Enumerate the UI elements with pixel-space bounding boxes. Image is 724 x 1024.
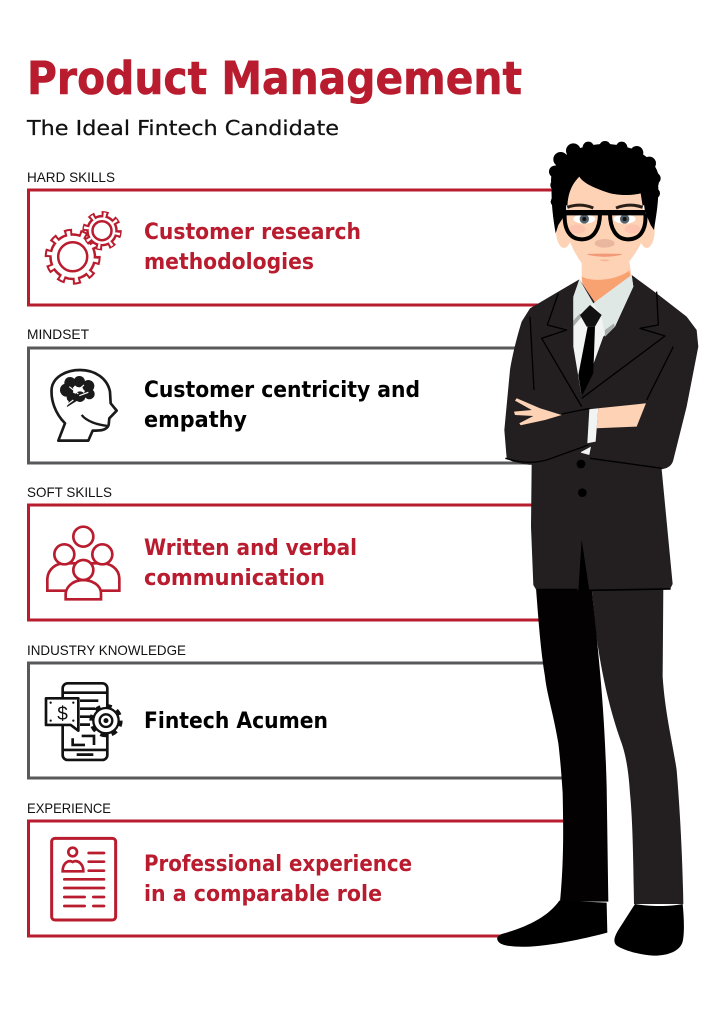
- panel text: hard skills: methodologies: [144, 250, 314, 275]
- panel: mindset: [27, 326, 545, 463]
- section label: mindset: MINDSET: [27, 326, 89, 342]
- panel text: experience: in a comparable role: [144, 882, 382, 907]
- panel frame: soft skills: [28, 505, 550, 620]
- man: jacket vent and buttons: [577, 460, 589, 591]
- title: Product Management: [27, 52, 522, 105]
- panel frame: mindset: [28, 348, 545, 463]
- panel frame: hard skills: [28, 190, 560, 305]
- man: legs and shoes: [497, 588, 684, 956]
- section label: industry knowledge: INDUSTRY KNOWLEDGE: [27, 642, 186, 658]
- panel text: soft skills: Written and verbal: [144, 536, 357, 561]
- panel text: mindset: empathy: [144, 408, 247, 433]
- panel text: hard skills: Customer research: [144, 220, 361, 245]
- panel frame: experience: [28, 821, 575, 936]
- panel text: mindset: Customer centricity and: [144, 378, 420, 403]
- section label: soft skills: SOFT SKILLS: [27, 484, 112, 500]
- panel text: experience: Professional experience: [144, 852, 412, 877]
- panel: hard skills: [27, 169, 560, 305]
- icon label: dollar sign: $: [57, 704, 68, 725]
- panel: soft skills: [27, 484, 550, 620]
- man: jacket and arms: [504, 275, 698, 591]
- icon: resume document: [52, 838, 116, 920]
- icon: gears: [47, 213, 120, 282]
- icon: phone with money and gear: [46, 683, 121, 760]
- icon: head with brain: [52, 370, 117, 441]
- section label: experience: EXPERIENCE: [27, 800, 111, 816]
- illustration: businessman: [497, 141, 698, 956]
- icon: group of people: [47, 527, 119, 599]
- panel text: soft skills: communication: [144, 566, 325, 591]
- section label: hard skills: HARD SKILLS: [27, 169, 115, 185]
- man: neck and head: [549, 141, 661, 307]
- panel frame: industry knowledge: [28, 663, 575, 778]
- panel text: industry knowledge: Fintech Acumen: [144, 709, 328, 734]
- panel: industry knowledge: [27, 642, 575, 778]
- subtitle: The Ideal Fintech Candidate: [26, 116, 339, 140]
- panel: experience: [27, 800, 575, 936]
